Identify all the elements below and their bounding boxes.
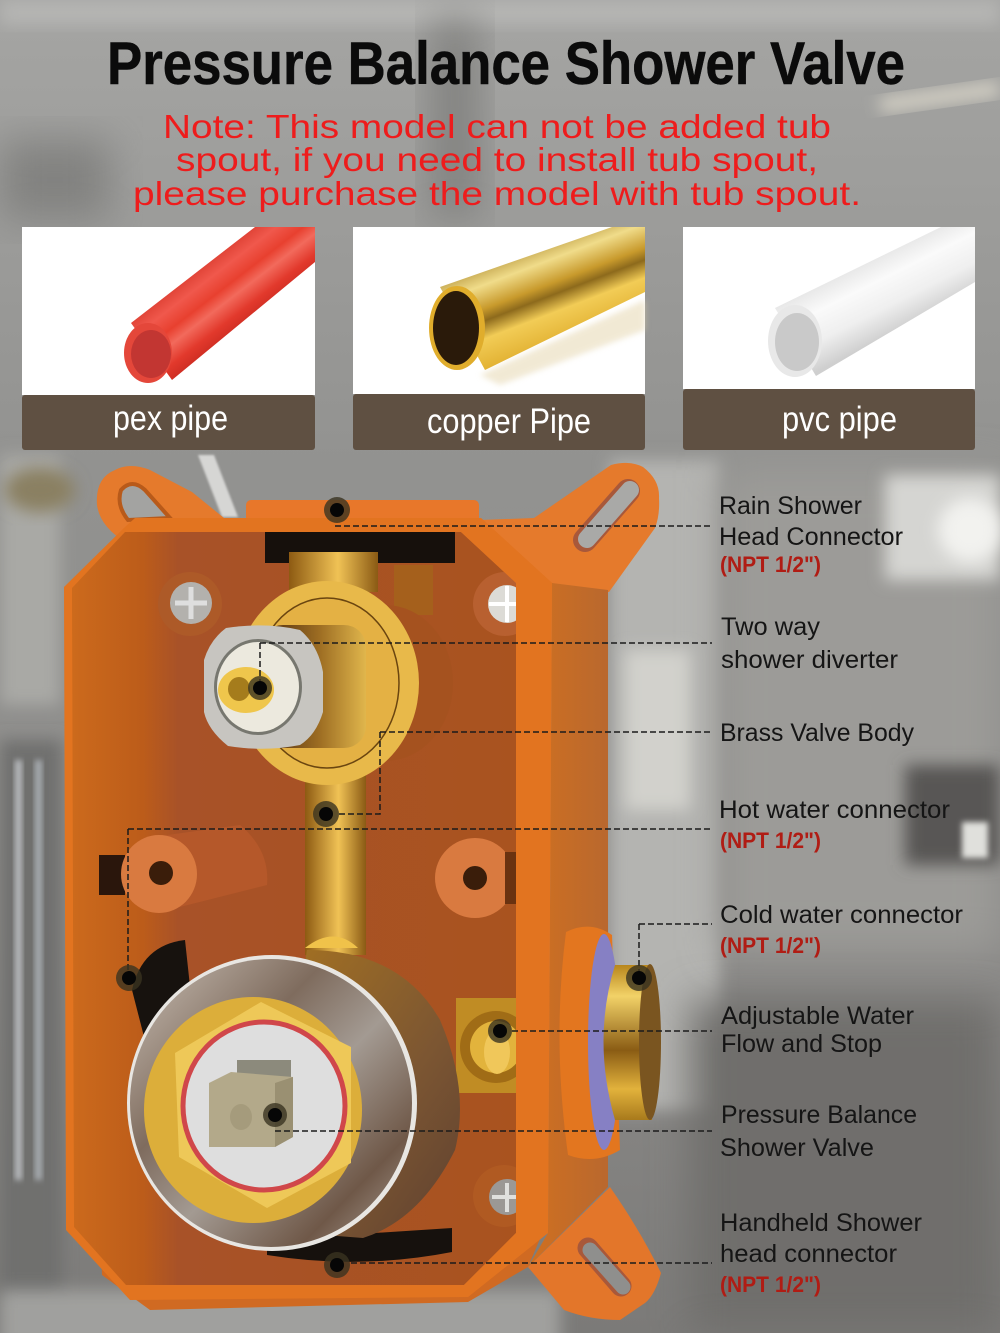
label: cold water connector xyxy=(720,901,963,958)
bottom skirt xyxy=(100,1220,548,1310)
hex nut xyxy=(175,1002,351,1208)
panel: copper pipe xyxy=(353,227,645,450)
red note: spout, if you need to install tub spout, xyxy=(176,141,818,178)
right rim strip xyxy=(461,518,552,1297)
label: handheld shower head connector xyxy=(720,1209,922,1297)
diverter housing xyxy=(317,605,453,761)
copper pipe image xyxy=(429,227,645,385)
label: adjustable water flow and stop xyxy=(721,1002,914,1058)
valve body bulb xyxy=(260,950,460,1238)
panel: pvc pipe: pvc pipe xyxy=(782,400,897,439)
side outlet ring xyxy=(559,927,620,1159)
panel: pex pipe: pex pipe xyxy=(113,399,228,438)
label: hot water connector: (NPT 1/2") xyxy=(720,828,821,853)
label: hot water connector: Hot water connector xyxy=(719,796,950,824)
label: two way shower diverter: Two way xyxy=(721,613,820,641)
outer shell xyxy=(64,518,552,1300)
label: pressure balance shower valve xyxy=(720,1101,917,1162)
top dark slot xyxy=(265,532,455,563)
diverter hex nut xyxy=(204,625,323,749)
label: brass valve body: Brass Valve Body xyxy=(720,719,914,747)
title: Pressure Balance Shower Valve xyxy=(107,30,905,97)
diverter brass disc xyxy=(235,581,419,785)
handle black seal xyxy=(132,940,192,1060)
white pipe image xyxy=(768,227,975,377)
valve mounting box xyxy=(64,463,661,1320)
top left ear xyxy=(97,466,246,545)
label: handheld shower head connector: Handheld Shower xyxy=(720,1209,922,1237)
vertical brass pipe xyxy=(305,770,366,955)
screw posts xyxy=(158,572,537,1227)
top connector lip xyxy=(246,500,479,530)
cartridge stem xyxy=(209,1060,293,1147)
label: pressure balance shower valve: Shower Valve xyxy=(720,1134,874,1162)
label: two way shower diverter: shower diverter xyxy=(721,646,898,674)
pressure valve silver ring xyxy=(127,955,417,1251)
red note: Note: This model can not be added tub xyxy=(163,108,831,145)
inner cavity xyxy=(72,532,516,1285)
label: handheld shower head connector: (NPT 1/2") xyxy=(720,1272,821,1297)
label: rain shower head connector: Rain Shower xyxy=(719,492,862,520)
bottom black seal xyxy=(267,1228,452,1262)
red pipe image xyxy=(124,227,315,383)
label: cold water connector: (NPT 1/2") xyxy=(720,933,821,958)
label: rain shower head connector: Head Connector xyxy=(719,523,903,551)
brass seat xyxy=(144,997,362,1223)
diverter cylinder xyxy=(261,625,366,748)
top right ear xyxy=(480,463,659,592)
bottom right ear xyxy=(528,1187,661,1320)
side mounting lugs xyxy=(99,825,516,918)
label: cold water connector: Cold water connector xyxy=(720,901,963,929)
panel: copper pipe: copper Pipe xyxy=(427,402,591,441)
back brass pipes xyxy=(289,552,378,592)
side wall xyxy=(528,583,608,1267)
callout markers and leader lines xyxy=(116,497,712,1278)
label: adjustable water flow and stop: Flow and Stop xyxy=(721,1030,882,1058)
red note: please purchase the model with tub spout. xyxy=(133,175,861,212)
label: two way shower diverter xyxy=(721,613,898,674)
panel: pvc pipe xyxy=(683,227,975,450)
white centre with red ring xyxy=(183,1022,345,1190)
label: rain shower head connector xyxy=(719,492,903,577)
label: rain shower head connector: (NPT 1/2") xyxy=(720,552,821,577)
red note xyxy=(133,108,861,212)
label: adjustable water flow and stop: Adjustable Water xyxy=(721,1002,914,1030)
label: hot water connector xyxy=(719,796,950,853)
small brass stop xyxy=(456,998,532,1093)
label: handheld shower head connector: head connector xyxy=(720,1240,897,1268)
label: pressure balance shower valve: Pressure Balance xyxy=(721,1101,917,1129)
panel: pex pipe xyxy=(22,227,315,450)
